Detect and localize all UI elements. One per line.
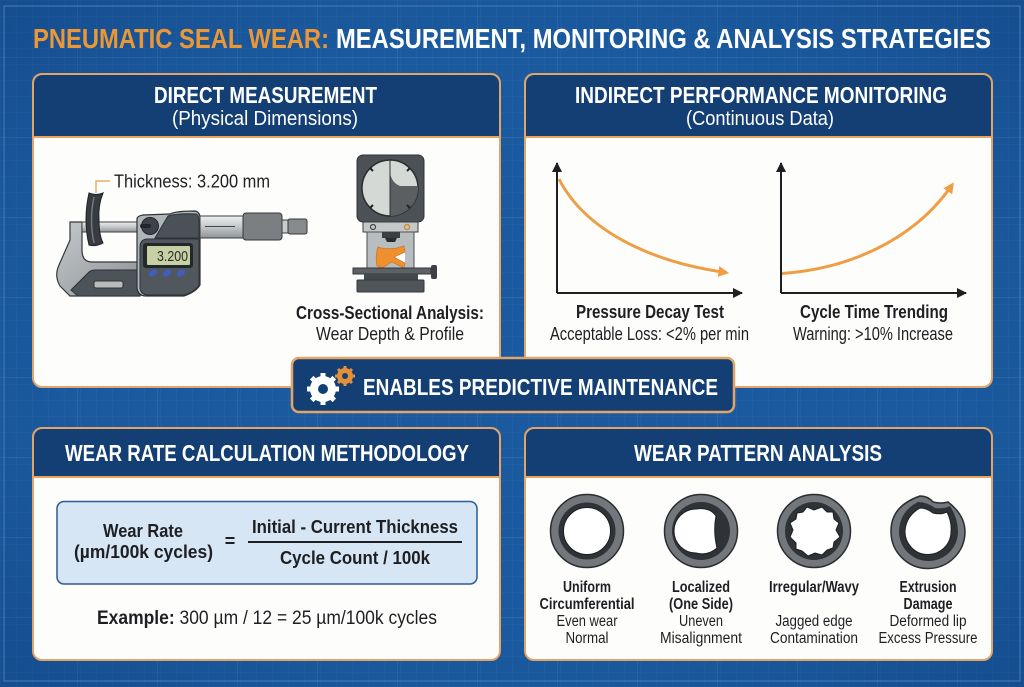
label: pressure decay test: Pressure Decay Test: [576, 302, 724, 322]
seal: localized one side: Uneven: [679, 613, 723, 630]
seal: extrusion damage: Excess Pressure: [878, 630, 978, 647]
panel: indirect performance monitoring: [525, 74, 992, 387]
panel header: indirect monitoring: [526, 75, 991, 137]
thickness callout: Thickness: 3.200 mm: [114, 170, 270, 192]
seal: irregular wavy: Jagged edge: [776, 613, 852, 630]
banner: enables predictive maintenance: ENABLES PREDICTIVE MAINTENANCE: [363, 374, 718, 400]
panel: wear rate calculation: [33, 428, 500, 660]
seal: irregular wavy: Contamination: [770, 630, 858, 647]
icon: digital micrometer with seal: 3.200: [157, 248, 188, 265]
formula box: Wear Rate: [103, 520, 183, 541]
label: cycle time trending: Cycle Time Trending: [800, 302, 948, 322]
seal: extrusion damage: Deformed lip: [890, 613, 966, 630]
panel: wear pattern analysis: [525, 428, 992, 660]
seal: localized one side: Misalignment: [660, 630, 743, 647]
text: cross-sectional analysis: [296, 303, 484, 344]
seal: irregular wavy: [769, 494, 859, 647]
seal: irregular wavy: Irregular/Wavy: [769, 579, 859, 596]
formula box: [57, 502, 477, 584]
panel header: direct measurement: [34, 75, 499, 137]
text: cross-sectional analysis: Cross-Sectional Analysis:: [296, 303, 484, 323]
seal: localized one side: Localized: [672, 579, 730, 596]
formula box: =: [225, 531, 235, 551]
panel header: wear rate: [34, 429, 499, 477]
seal: extrusion damage: [878, 496, 978, 647]
panel header: indirect monitoring: INDIRECT PERFORMANCE MONITORING: [575, 82, 947, 108]
chart: pressure decay: [557, 163, 742, 293]
panel header: direct measurement: DIRECT MEASUREMENT: [154, 82, 378, 108]
seal: localized one side: (One Side): [669, 596, 733, 613]
panel: direct measurement: [33, 74, 500, 387]
formula box: Cycle Count / 100k: [280, 547, 431, 568]
icon: optical comparator: [353, 155, 437, 292]
seal: localized one side: [660, 494, 743, 647]
label: pressure decay test: Acceptable Loss: <2% per min: [550, 324, 749, 344]
panel header: wear pattern: WEAR PATTERN ANALYSIS: [634, 440, 882, 466]
panel header: direct measurement: (Physical Dimensions): [172, 107, 358, 130]
label: cycle time trending: [793, 302, 953, 344]
seal: extrusion damage: Damage: [904, 596, 953, 613]
label: pressure decay test: [550, 302, 749, 344]
seal: uniform circumferential: [540, 494, 634, 647]
icon: orange gear: [335, 366, 355, 386]
icon: white gear: [307, 373, 339, 405]
seal: uniform circumferential: Uniform: [563, 579, 611, 596]
label: cycle time trending: Warning: >10% Increase: [793, 324, 953, 344]
text: cross-sectional analysis: Wear Depth & Profile: [316, 324, 464, 344]
panel header: wear pattern: [526, 429, 991, 477]
formula box: Initial - Current Thickness: [252, 516, 458, 537]
banner: enables predictive maintenance: [292, 358, 734, 412]
seal: uniform circumferential: Normal: [566, 630, 608, 647]
icon: digital micrometer with seal: [57, 193, 307, 296]
chart: cycle time trend: [781, 163, 966, 293]
title: PNEUMATIC SEAL WEAR:: [33, 23, 329, 54]
seal: extrusion damage: Extrusion: [900, 579, 956, 596]
panel header: indirect monitoring: (Continuous Data): [686, 107, 834, 130]
panel header: wear rate: WEAR RATE CALCULATION METHODOLOGY: [65, 440, 469, 466]
worked example: Example: 300 µm / 12 = 25 µm/100k cycles: [97, 608, 437, 629]
seal: uniform circumferential: Circumferential: [540, 596, 634, 613]
title: [33, 23, 991, 54]
formula box: (µm/100k cycles): [74, 541, 213, 562]
seal: uniform circumferential: Even wear: [556, 613, 618, 630]
